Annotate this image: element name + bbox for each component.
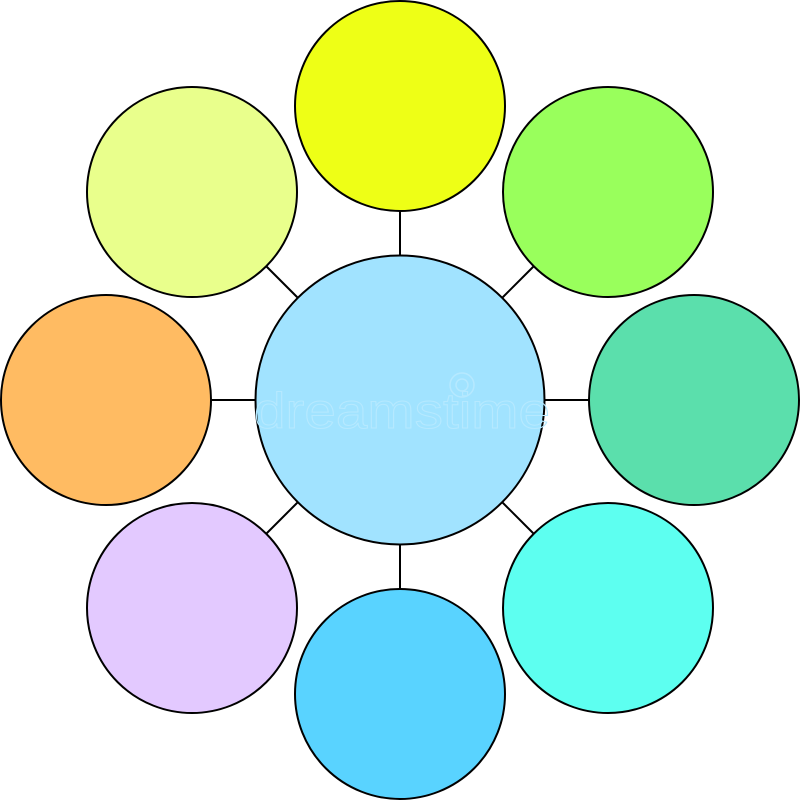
- circle: bottom blue: [295, 589, 505, 799]
- circle: lower right aqua: [503, 503, 713, 713]
- circle: lower left lavender: [87, 503, 297, 713]
- circle: upper right green: [503, 87, 713, 297]
- circle: top yellow: [295, 1, 505, 211]
- circle: central hub: [256, 256, 544, 544]
- circle: left orange: [1, 295, 211, 505]
- connector lines: [210, 210, 590, 590]
- watermark icon: spiral: [450, 373, 474, 397]
- circle: upper left pale yellow: [87, 87, 297, 297]
- circle: right teal: [589, 295, 799, 505]
- watermark text: dreamstime: [254, 383, 550, 439]
